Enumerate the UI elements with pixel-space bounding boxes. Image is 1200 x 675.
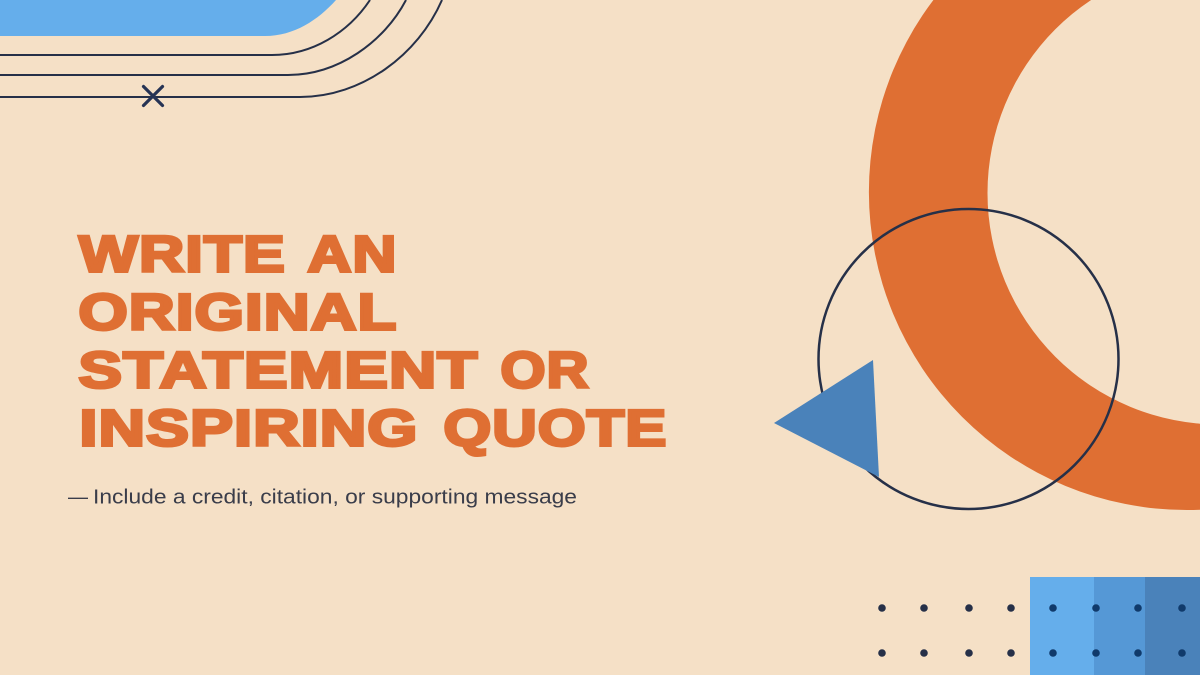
top-left blue rounded shape [0, 0, 336, 36]
bottom-right blue stepped blocks [1030, 577, 1200, 675]
title: INSPIRING [80, 400, 418, 456]
dot grid [878, 604, 1186, 657]
title: AN [308, 226, 398, 282]
outline circle [818, 209, 1118, 509]
title: OR [500, 342, 590, 398]
title: QUOTE [444, 400, 668, 456]
top-left concentric curved lines [0, 0, 442, 97]
icon: cross mark [144, 86, 162, 106]
title [78, 226, 668, 456]
credit line: — [68, 486, 88, 508]
title: WRITE [79, 226, 286, 282]
title: STATEMENT [78, 342, 478, 398]
blue triangle [774, 360, 879, 477]
credit line: Include a credit, citation, or supporting message [93, 486, 577, 508]
title: ORIGINAL [78, 284, 398, 340]
orange ring [869, 0, 1200, 510]
